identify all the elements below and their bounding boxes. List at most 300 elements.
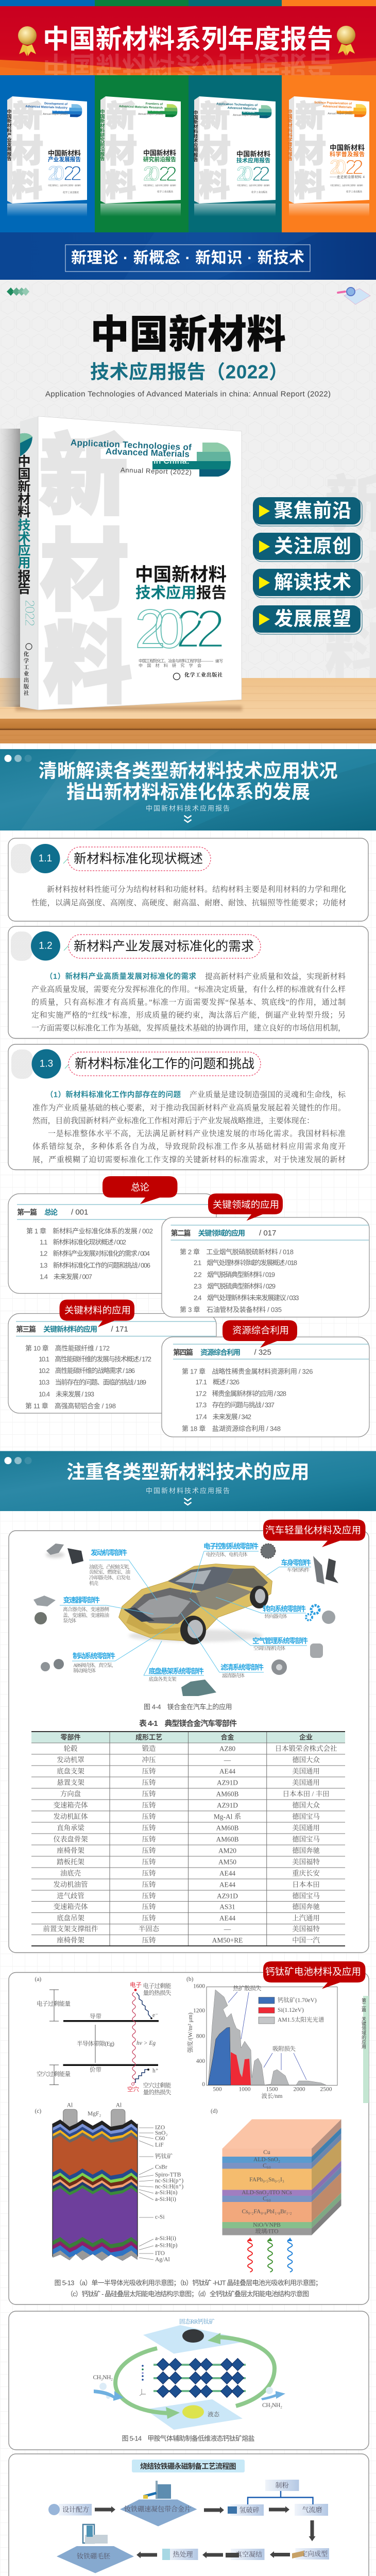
table: typical magnesium alloy parts: 美国福特: [292, 1858, 320, 1866]
table: typical magnesium alloy parts: 踏板托架: [57, 1858, 84, 1866]
label: filter parts: [220, 1663, 264, 1679]
table: typical magnesium alloy parts: 锻造: [142, 1744, 156, 1753]
book: science popularization: 20: [330, 157, 346, 178]
chart a: single semiconductor absorption: 电子: [130, 1981, 142, 1989]
book: science popularization: ——走近前沿新材料 4: [330, 174, 365, 179]
table: typical magnesium alloy parts: 底盘吊架: [57, 1913, 84, 1922]
toc card: 总论: / 001: [71, 1208, 88, 1217]
book: research frontiers: [100, 96, 181, 216]
panel: 1.3: [8, 1044, 368, 1170]
toc card: 总论: 1.1 新材料标准化现状概述 / 002: [40, 1239, 126, 1246]
toc card: 关键材料: 10.4 未来发展 / 193: [39, 1390, 94, 1398]
shelf wood: [0, 678, 376, 743]
diagram d: all perovskite tandem cube: NiO/VNPB: [253, 2222, 281, 2228]
chart a: single semiconductor absorption: hv > Eg: [136, 2040, 156, 2046]
diagram d: all perovskite tandem cube: Cs₀.₂FA₀.₈PbI₁.₈Br₁.₂: [242, 2209, 292, 2215]
top plane: [143, 2325, 252, 2353]
cover 2022: 22: [175, 599, 226, 659]
label: engine parts: 齿轮室、燃烧室、油: [89, 1568, 130, 1575]
label: brake parts: ABS阀壳体、真空泵、: [73, 1662, 116, 1668]
book: technology application: Application Technologies of: [216, 103, 258, 107]
main book: 料: [43, 615, 132, 714]
chart a: single semiconductor absorption: e⁻: [152, 2012, 158, 2019]
car illustration: [118, 1564, 272, 1645]
book: science popularization: Annual Report (2022): [328, 112, 352, 115]
callout: 资源综合利用: [223, 1320, 297, 1348]
arrow: green cycle: [115, 2337, 275, 2413]
diagram c: perovskite silicon stack: 钙钛矿: [155, 2153, 173, 2160]
paragraph: 产业高质量发展，需要充分发挥标准化的作用。“标准决定质量，有什么样的标准就有什么样: [31, 985, 346, 994]
book: research frontiers: Advanced Materials Research: [119, 105, 163, 110]
label: brake parts: 制动阀壳体: [73, 1667, 96, 1674]
panel: liquid perovskite molten salt: [9, 2311, 369, 2450]
chart a: single semiconductor absorption: (a): [35, 1976, 41, 1982]
paragraph: 的质量，只有高标准才有高质量。”标准一方面需要发挥“保基本、筑底线”的作用，通过制: [31, 997, 346, 1007]
label: chassis parts: 底盘悬架系统零部件: [148, 1667, 204, 1675]
publisher lines: 中国工程院化工、冶金与材料工程学部: [139, 658, 201, 664]
table: typical magnesium alloy parts: AE44: [219, 1869, 235, 1877]
step: 定向成型: 定向成型: [301, 2550, 328, 2557]
book: research frontiers: 22: [159, 163, 177, 185]
diagram c: perovskite silicon stack: SnO₂: [155, 2130, 167, 2136]
tag: 聚焦前沿: [253, 497, 362, 526]
diagram d: all perovskite tandem cube: C₆₀: [263, 2196, 271, 2202]
left gas arrow: [94, 2383, 124, 2401]
toc card: 关键领域: [162, 1193, 369, 1317]
table: typical magnesium alloy parts: 半固态: [139, 1925, 160, 1933]
diagram c: perovskite silicon stack: IZO: [155, 2125, 165, 2131]
main book: in China:: [153, 457, 190, 466]
book: research frontiers: 材: [105, 134, 137, 169]
book: research frontiers: 中国新材料研究前沿报告: [100, 109, 105, 161]
book: technology application: 中国新材料: [236, 150, 270, 158]
table: typical magnesium alloy parts: 重庆长安: [292, 1869, 320, 1877]
diagram c: perovskite silicon stack: ITO: [155, 2250, 165, 2257]
label: transmission parts: 离合器壳体、变速器侧: [63, 1606, 109, 1613]
diagram c: perovskite silicon stack: a-Si:H(i): [155, 2196, 176, 2202]
book shadow: [0, 429, 22, 707]
table: typical magnesium alloy parts: 压铸: [142, 1790, 156, 1798]
chart b: spectrum: (b): [186, 1976, 194, 1982]
table: typical magnesium alloy parts: 压铸: [142, 1767, 156, 1775]
step: 热处理: 热处理: [173, 2550, 193, 2558]
book: science popularization: 材: [294, 134, 326, 169]
table: typical magnesium alloy parts: 冲压: [142, 1756, 156, 1764]
book: research frontiers: 中国新材料: [143, 149, 176, 157]
step: 定向成型: [292, 2548, 329, 2560]
book: science popularization: Science Popularization of: [314, 101, 352, 106]
table: typical magnesium alloy parts: 美国通用: [292, 1767, 320, 1775]
toc card: 关键领域: 第 3 章 石油管材及装备材料 / 035: [180, 1306, 282, 1314]
paragraph: 产业质量是建设制造强国的灵魂和生命线，标: [190, 1090, 346, 1099]
left gas label: CH₃NH₂: [93, 2375, 113, 2381]
chart b: spectrum: 1500: [266, 2087, 278, 2093]
paragraph: [32, 1090, 346, 1164]
table: typical magnesium alloy parts: AE44: [219, 1767, 235, 1775]
table: typical magnesium alloy parts: AE44: [219, 1914, 235, 1922]
book: science popularization: 料: [294, 168, 325, 203]
icon: right medal: [337, 26, 355, 56]
diagram c: perovskite silicon stack: a-Si:H(i): [155, 2235, 176, 2242]
toc card: 关键领域: 第 2 章 工业烟气脱硝脱硫新材料 / 018: [180, 1248, 294, 1256]
toc card: 总论: 1.2 新材料产业发展对标准化的需求 / 004: [40, 1250, 150, 1257]
feature tags: [253, 497, 362, 634]
table: typical magnesium alloy parts: 前置支架支撑组件: [43, 1925, 98, 1933]
book: technology application: 新: [200, 100, 230, 133]
toc card: 关键领域: 关键领域的应用: [198, 1229, 245, 1238]
publisher mark: [173, 673, 180, 680]
book: research frontiers: 料: [105, 168, 136, 203]
chart b: spectrum: 1200: [193, 2008, 205, 2014]
diagram c: perovskite silicon stack: Al: [67, 2102, 73, 2108]
book: industry development: in China:: [53, 109, 65, 112]
table: typical magnesium alloy parts: 中国一汽: [292, 1936, 320, 1944]
toc card: 总论: 第 1 章 新材料产业标准化体系的发展 / 002: [26, 1227, 153, 1235]
label: electronic parts: 电子控制系统零部件: [203, 1542, 259, 1550]
toc card: 资源综合利用: 第 18 章 盐湖资源综合利用 / 348: [182, 1425, 281, 1432]
table: typical magnesium alloy parts: 压铸: [142, 1936, 156, 1944]
book: industry development: 料: [11, 168, 42, 203]
table: typical magnesium alloy parts: 发动机罩: [57, 1756, 84, 1764]
chart a: single semiconductor absorption: 半导体带隙(Eg): [77, 2040, 114, 2047]
tag: 解读技术: 解读技术: [274, 572, 351, 592]
section header 1: [0, 749, 376, 831]
table: typical magnesium alloy parts: 压铸: [142, 1812, 156, 1821]
table: typical magnesium alloy parts: —: [224, 1925, 231, 1933]
label: steering parts: 转向器壳体: [265, 1613, 287, 1620]
book: technology application: Annual Report (2022): [233, 114, 258, 117]
cover ghost characters: 新: [39, 427, 128, 526]
label: chassis parts: 底盘各类支架: [148, 1675, 177, 1683]
toc card: 资源综合利用: 17.2 稀贵金属新材料的应用 / 328: [196, 1390, 286, 1397]
tag: 解读技术: [253, 569, 362, 598]
toc card: 关键材料: 10.2 高性能碳纤维的战略需求 / 186: [39, 1367, 135, 1375]
paragraph: [31, 972, 346, 1032]
bottom plane: [145, 2399, 243, 2430]
table: typical magnesium alloy parts: 日本本田 / 丰田: [283, 1790, 329, 1798]
table: typical magnesium alloy parts: 仪表盘骨架: [54, 1835, 88, 1843]
panel: four book colours: [0, 75, 376, 232]
tag: 发展展望: [253, 605, 362, 634]
callout: 汽车轻量化材料及应用: [263, 1520, 366, 1547]
side tab: [361, 1996, 369, 2103]
book: industry development: 新: [12, 100, 42, 133]
table: typical magnesium alloy parts: 零部件: [60, 1733, 81, 1741]
toc card: 关键材料: 第 11 章 高强高韧铝合金 / 198: [25, 1402, 116, 1410]
chart b: spectrum: 2500: [320, 2087, 332, 2093]
toc card: 关键材料: [8, 1299, 216, 1413]
step: 气流磨: 气流磨: [302, 2506, 322, 2514]
callout: 汽车轻量化材料及应用: 汽车轻量化材料及应用: [265, 1525, 361, 1535]
table: typical magnesium alloy parts: 进气歧管: [57, 1892, 84, 1900]
panel: perovskite cell materials: [8, 1961, 369, 2305]
table: typical magnesium alloy parts: 压铸: [142, 1801, 156, 1809]
table: typical magnesium alloy parts: 压铸: [142, 1880, 156, 1889]
table: typical magnesium alloy parts: 德国宝马: [292, 1892, 320, 1900]
book: research frontiers: 新: [106, 100, 136, 133]
table: typical magnesium alloy parts: AE44: [219, 1880, 235, 1889]
slogan box: [65, 245, 310, 272]
car part photos: [33, 1544, 338, 1696]
label: chassis parts: [148, 1667, 204, 1683]
chart a: single semiconductor absorption: 价带: [90, 2066, 101, 2073]
callout: 钙钛矿电池材料及应用: [263, 1961, 366, 1989]
diagram d: all perovskite tandem cube: FAPb₀.₅Sn₀.₅I₃: [249, 2177, 284, 2183]
paragraph: 然而，目前我国新材料产业标准化工作相对滞后于产业发展战略推进，主要体现在：: [32, 1116, 314, 1125]
table: typical magnesium alloy parts: 直角承梁: [57, 1824, 84, 1832]
table: typical magnesium alloy parts: 发动机缸体: [54, 1812, 88, 1821]
book: science popularization: Advanced Materials: [323, 105, 352, 109]
book: research frontiers: Frontiers of: [146, 103, 163, 106]
table title 4-1: 表 4-1 典型镁合金汽车零部件: [139, 1719, 237, 1728]
panel: 1.2: [8, 926, 368, 1039]
icon: left medal: [18, 26, 37, 56]
table: typical magnesium alloy parts: AM60B: [216, 1835, 239, 1843]
book: research frontiers: 研究前沿报告: [143, 156, 176, 163]
chart a: single semiconductor absorption: 空穴: [127, 2086, 139, 2093]
toc card: 关键材料: 第三篇: [16, 1325, 36, 1333]
spine mark: [20, 433, 32, 456]
table: typical magnesium alloy parts: AM50: [218, 1858, 236, 1866]
label: liquid: 液态: [208, 2411, 219, 2418]
label: solid perovskite: 固态RR钙钛矿: [179, 2318, 215, 2325]
main book: 技术应用: [135, 584, 196, 602]
diagram c: perovskite silicon stack: [35, 2103, 183, 2263]
diagram c: perovskite silicon stack: c-Si: [155, 2214, 165, 2221]
book: science popularization: 中国新材料科学普及报告: [287, 109, 293, 161]
book: industry development: 中国工程院化工、冶金与材料工程学部 组织编写: [48, 184, 81, 187]
main book: Advanced Materials: [106, 447, 190, 459]
chart b: spectrum: 2000: [294, 2087, 305, 2093]
toc card: 关键领域: / 017: [259, 1229, 276, 1238]
tag: 关注原创: [253, 533, 362, 562]
diagram c: perovskite silicon stack: Al: [116, 2102, 122, 2108]
tag: 关注原创: 关注原创: [274, 536, 351, 556]
table: typical magnesium alloy parts: 悬置支架: [57, 1778, 84, 1787]
table: typical magnesium alloy parts: AS31: [219, 1903, 235, 1910]
chart b: spectrum: 1000: [239, 2087, 251, 2093]
callout: 关键领域的应用: [208, 1193, 283, 1221]
diagram d: all perovskite tandem cube: 玻璃/ITO: [255, 2228, 279, 2235]
book: research frontiers: in China:: [148, 109, 161, 112]
icon: chevrons: [184, 1498, 192, 1505]
toc card: 关键领域: 第二篇: [171, 1229, 191, 1238]
table: typical magnesium alloy parts: 压铸: [142, 1824, 156, 1832]
toc card: 资源综合利用: 17.1 概述 / 326: [196, 1378, 240, 1386]
diagram d: all perovskite tandem cube: (d): [211, 2108, 218, 2114]
book: science popularization: 化学工业出版社: [346, 190, 363, 194]
label: engine parts: 冷却器壳体、启发电: [89, 1574, 130, 1581]
chart b: spectrum: 1600: [193, 1984, 205, 1990]
label: electronic parts: [203, 1542, 259, 1558]
spine title: 中国新材料: [16, 454, 31, 518]
toc card: 资源综合利用: 第 17 章 战略性稀贵金属材料资源利用 / 326: [182, 1367, 313, 1376]
chart b: spectrum: 吸附损失: [272, 2045, 296, 2053]
book: science popularization: 22: [345, 156, 364, 179]
paragraph: 一方面需要以标准化工作为基础，发挥质量技术基础的协调作用，建立良好的市场信用机制，: [31, 1023, 346, 1032]
book: research frontiers: 中国工程院化工、冶金与材料工程学部 组织编写: [143, 184, 176, 187]
table: typical magnesium alloy parts: 美国通用: [292, 1778, 320, 1787]
toc card: 关键领域: 2.4 烟气处理新材料未来发展建议 / 033: [194, 1294, 299, 1301]
main book: Annual Report (2022): [121, 466, 192, 476]
label: filter parts: 滤清系统零部件: [220, 1663, 264, 1671]
table: typical magnesium alloy parts: 压铸: [142, 1778, 156, 1787]
table: typical magnesium alloy parts: 变速箱壳体: [54, 1902, 88, 1910]
main book: 20: [135, 599, 184, 659]
table: typical magnesium alloy parts: Mg-Al 系: [214, 1812, 241, 1821]
slogan text: 新理论 · 新概念 · 新知识 · 新技术: [71, 249, 304, 267]
table: typical magnesium alloy parts: 德国奔驰: [292, 1846, 320, 1855]
paragraph: 定和实施严格的“红线”标准，形成质量的硬约束，淘汰落后产能，倒逼产业转型升级；另: [31, 1010, 346, 1020]
label: body parts: 车身零部件: [281, 1558, 311, 1567]
step: 设计配方: 设计配方: [62, 2506, 89, 2513]
book: technology application: 材: [199, 134, 231, 169]
table: typical magnesium alloy parts: AZ91D: [217, 1778, 238, 1787]
icon: green diamonds: [7, 287, 29, 296]
toc card: 关键材料: 关键新材料的应用: [43, 1325, 97, 1333]
dark disk: [182, 2329, 204, 2343]
main book: 化学工业出版社: [184, 672, 223, 678]
label: steering parts: 转向系统零部件: [263, 1604, 306, 1613]
header subtitle: 中国新材料技术应用报告: [146, 805, 230, 812]
diagram c: perovskite silicon stack: nc-Si:H(n⁺): [155, 2183, 183, 2190]
panel: 1.1: 新材料标准化现状概述: [74, 852, 203, 866]
main book: 材: [40, 522, 129, 621]
figure caption 4-4: 图 4-4 镁合金在汽车上的应用: [144, 1703, 232, 1710]
step: 设计配方: [48, 2504, 92, 2515]
book: science popularization: 新: [295, 100, 325, 133]
title: 中国新材料: 中国新材料: [90, 313, 286, 357]
header subtitle: 中国新材料技术应用报告: [146, 1487, 230, 1495]
book: science popularization: 中国新材料: [330, 143, 365, 151]
label: engine parts: [89, 1549, 133, 1587]
diagram c: perovskite silicon stack: nc-Si:H(p⁺): [155, 2178, 183, 2184]
table: typical magnesium alloy parts: [31, 1732, 345, 1946]
book: industry development: 20: [48, 163, 64, 184]
book: science popularization: 中国工程院化工、冶金与材料工程学部 组织编写: [330, 184, 364, 187]
main book: 化学工业出版社: [23, 651, 29, 696]
label: transmission parts: 变速器零部件: [63, 1596, 100, 1604]
paragraph: 新材料按材料性能可分为结构材料和功能材料。结构材料主要是利用材料的力学和理化: [47, 885, 346, 894]
panel: blue slogan band: [0, 232, 376, 280]
label: air parts: 空气管理系统零部件: [252, 1636, 308, 1645]
diagram d: all perovskite tandem cube: ALD-SnO₂/ITO NCs: [242, 2190, 292, 2196]
toc card: 资源综合利用: 17.4 未来发展 / 342: [196, 1413, 251, 1421]
table: typical magnesium alloy parts: 压铸: [142, 1846, 156, 1855]
panel: 1.2: 1.2: [39, 941, 53, 951]
callout: 关键材料的应用: 关键材料的应用: [64, 1304, 131, 1316]
bracket: [248, 2491, 313, 2504]
table: typical magnesium alloy parts: AM50+RE: [212, 1936, 243, 1944]
paragraph: [31, 885, 346, 907]
book: technology application: 料: [199, 168, 230, 203]
table: typical magnesium alloy parts: 压铸: [142, 1892, 156, 1900]
step: 热处理: [162, 2549, 198, 2560]
table: typical magnesium alloy parts: 压铸: [142, 1835, 156, 1843]
main book: 中国材料研究学会: [139, 663, 201, 668]
callout: 总论: [102, 1176, 177, 1204]
table: typical magnesium alloy parts: 日本锻荣舍株式会社: [275, 1744, 337, 1753]
table: typical magnesium alloy parts: 德国宝马: [292, 1835, 320, 1843]
step: 毛胚: 钕铁硼毛胚: [77, 2552, 111, 2560]
table: typical magnesium alloy parts: AM60B: [216, 1790, 239, 1798]
book: technology application: 中国新材料技术应用报告: [193, 110, 198, 162]
table: typical magnesium alloy parts: 方向盘: [60, 1790, 81, 1798]
table: typical magnesium alloy parts: 德国大众: [292, 1756, 320, 1764]
diagram d: all perovskite tandem cube: C₆₀: [263, 2163, 271, 2169]
figure caption 5-13: （c）钙钛矿 - 晶硅叠层太阳能电池结构示意图；（d）全钙钛矿叠层太阳能电池结构示意图: [66, 2290, 309, 2298]
chart b: spectrum: 400: [196, 2058, 205, 2064]
step: 毛胚: [57, 2546, 134, 2573]
light waves: [248, 2239, 252, 2272]
chart b: spectrum: 波长/nm: [262, 2092, 282, 2099]
table: typical magnesium alloy parts: AZ91D: [217, 1892, 238, 1900]
label: steering parts: [263, 1604, 306, 1620]
paragraph: （1）新材料标准化工作内部存在的问题: [46, 1090, 181, 1099]
paragraph: （1）新材料产业高质量发展对标准化的需求: [45, 972, 197, 981]
main book: [0, 416, 242, 714]
chart a: single semiconductor absorption: 空穴过剩能量: [37, 2070, 71, 2077]
figure caption 5-14: 图 5-14 甲胺气体辅助制备低维液态钙钛矿熔盐: [122, 2435, 254, 2442]
banner title: 中国新材料系列年度报告: [43, 25, 333, 54]
table: typical magnesium alloy parts: AZ91D: [217, 1801, 238, 1809]
label: brake parts: [73, 1652, 116, 1674]
book: industry development: 中国新材料: [48, 149, 81, 157]
table: typical magnesium alloy parts: AM20: [218, 1846, 236, 1855]
table: typical magnesium alloy parts: 日本本田: [292, 1880, 320, 1889]
table: typical magnesium alloy parts: 压铸: [142, 1902, 156, 1910]
label: engine parts: 发动机零部件: [91, 1549, 128, 1557]
toc card: 资源综合利用: 资源综合利用: [200, 1348, 241, 1357]
label: filter parts: 滤清器壳体: [222, 1672, 245, 1679]
book: research frontiers: Annual Report (2022): [138, 113, 163, 116]
table: typical magnesium alloy parts: 美国通用: [292, 1824, 320, 1832]
chart b: spectrum: 0: [202, 2081, 205, 2088]
crystal structure: [140, 2358, 246, 2398]
main book: 报告: [16, 569, 31, 595]
main book: 2022: [22, 600, 38, 626]
table: typical magnesium alloy parts: 德国宝马: [292, 1812, 320, 1821]
callout: 关键领域的应用: 关键领域的应用: [213, 1199, 279, 1210]
book: technology application: 22: [252, 163, 270, 185]
panel: 1.3: 1.3: [40, 1058, 53, 1070]
table: typical magnesium alloy parts: 德国奔驰: [292, 1902, 320, 1910]
book: science popularization: in China:: [337, 109, 350, 112]
book: science popularization: [287, 96, 369, 216]
red series banner: [0, 6, 376, 79]
icon: chevrons: [184, 816, 192, 822]
callout: 资源综合利用: 资源综合利用: [232, 1325, 289, 1335]
chart b: spectrum: [186, 1976, 337, 2099]
tag: 发展展望: 发展展望: [274, 608, 351, 630]
toc card: 关键材料: / 171: [111, 1325, 128, 1333]
diagram c: perovskite silicon stack: C60: [155, 2136, 165, 2142]
book: technology application: [193, 96, 276, 216]
book: technology application: 技术应用报告: [236, 157, 270, 164]
chart b: spectrum: 钙钛矿(1.70eV): [278, 1996, 317, 2004]
table: typical magnesium alloy parts: 座椅骨架: [57, 1936, 84, 1944]
tag: 聚焦前沿: 聚焦前沿: [274, 500, 351, 521]
step: 真空凝结: 真空凝结: [235, 2550, 262, 2558]
logo D: [152, 443, 231, 477]
icon: magnifier and document: [337, 287, 370, 304]
chart b: spectrum: 热扩散损失: [233, 1985, 262, 1992]
subtitle: 技术应用报告: 技术应用报告（2022）: [90, 362, 288, 382]
diagram d: all perovskite tandem cube: ALD-SnO₂: [253, 2157, 280, 2163]
book: technology application: 化学工业出版社: [251, 191, 268, 194]
toc card: 总论: [8, 1176, 216, 1293]
yellow disk: [182, 2405, 204, 2418]
